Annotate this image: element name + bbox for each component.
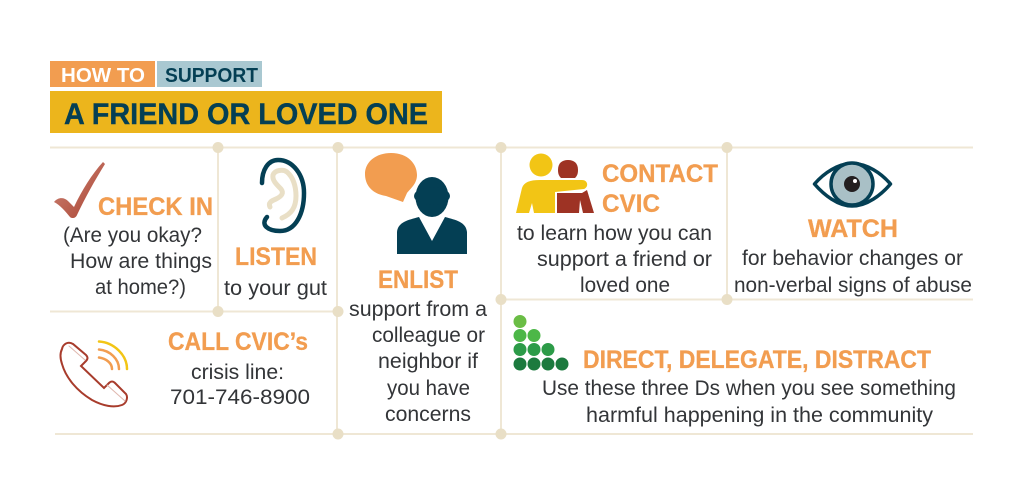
heading: watch: WATCH [808, 215, 898, 243]
panel: enlist [349, 153, 487, 426]
text: enlist: concerns [385, 403, 471, 426]
tag: support: SUPPORT [165, 65, 258, 87]
text: watch: for behavior changes or [742, 247, 963, 270]
icon: check mark [54, 162, 105, 218]
heading banner: A FRIEND OR LOVED ONE [64, 98, 428, 131]
icon: two people [516, 154, 594, 213]
icon: speech bubble [365, 153, 417, 202]
text: crisis line: 701-746-8900 [170, 386, 310, 409]
icon: green dots [514, 315, 568, 370]
panel: direct delegate distract [514, 315, 956, 427]
text: enlist: neighbor if [378, 350, 478, 373]
heading: call cvic: CALL CVIC’s [168, 328, 308, 356]
text: three Ds [542, 377, 956, 427]
text: check in questions: (Are you okay? [63, 224, 202, 247]
text: check in questions: How are things [70, 250, 212, 273]
panel: watch [734, 163, 972, 297]
icon: ear [262, 160, 304, 231]
text: contact cvic: to learn how you can [517, 222, 712, 245]
text: watch: non-verbal signs of abuse [734, 274, 972, 297]
panel: listen [224, 160, 327, 300]
text: three Ds: Use these three Ds when you see something [542, 377, 956, 400]
text: crisis line: crisis line: [191, 361, 284, 384]
text: three Ds: harmful happening in the community [586, 404, 934, 427]
icon: phone [60, 342, 127, 406]
text: check in questions: at home?) [95, 276, 186, 299]
text: crisis line [170, 361, 310, 409]
text: contact cvic: loved one [580, 274, 670, 297]
icon: person silhouette [397, 177, 467, 254]
heading: enlist: ENLIST [378, 266, 458, 294]
text: check in questions [63, 224, 212, 299]
heading: listen: LISTEN [235, 243, 317, 271]
heading: direct delegate distract: DIRECT, DELEGATE, DISTRACT [583, 346, 931, 374]
text: listen: to your gut [224, 277, 327, 300]
tag: how to: HOW TO [61, 65, 145, 87]
tag: how to [50, 61, 155, 87]
text: watch [734, 247, 972, 297]
heading: contact cvic: CONTACT [602, 160, 718, 188]
panel: call cvic [60, 328, 310, 409]
grid lines and nodes [50, 142, 973, 440]
text: enlist [349, 298, 487, 426]
heading: check in: CHECK IN [98, 193, 213, 221]
text: enlist: colleague or [372, 324, 485, 347]
panel: contact cvic [516, 154, 718, 297]
text: enlist: support from a [349, 298, 487, 321]
icon: eye [814, 163, 890, 206]
heading: contact cvic [602, 160, 718, 218]
heading: contact cvic: CVIC [602, 190, 660, 218]
text: contact cvic [517, 222, 712, 297]
text: enlist: you have [387, 377, 470, 400]
title block [50, 61, 442, 133]
text: contact cvic: support a friend or [537, 248, 712, 271]
panel: check in [54, 162, 213, 299]
